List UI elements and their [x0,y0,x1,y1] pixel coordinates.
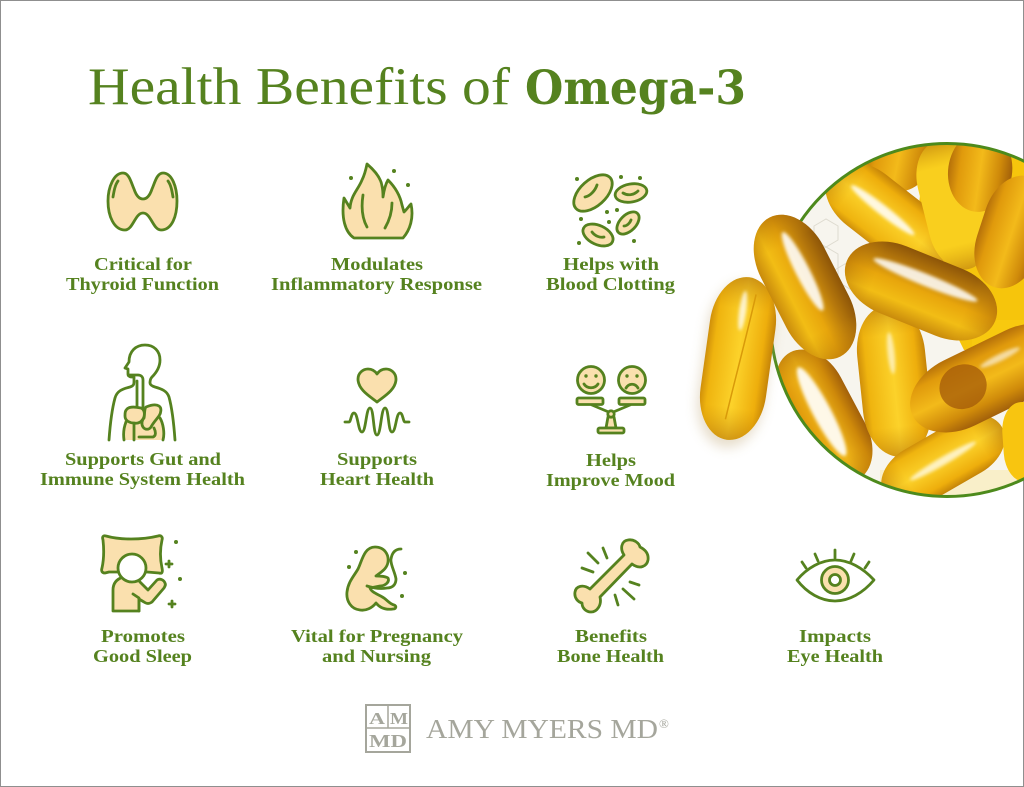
photo: omega-3 capsules in a circle [692,142,1024,498]
logo: Amy Myers MD [366,705,669,752]
icon: heart with pulse wave [345,369,409,435]
logo wordmark: ® [659,716,669,731]
icon: fetus [347,547,407,610]
label: sleep: Promotes [101,626,185,646]
label: heart health: Supports [337,449,417,469]
label: sleep [93,626,192,666]
item: eye health [787,550,883,666]
icon: body with digestive system [109,345,175,440]
label: heart health: Heart Health [320,469,434,489]
icon: thyroid [108,173,177,230]
icon: flame [343,164,412,238]
circle image [774,145,1024,495]
icon: bone [575,540,648,612]
capsule: tilted over circle edge [738,202,872,372]
label: gut and immune: Supports Gut and [65,449,221,469]
icon: blood cells [567,168,648,250]
icon: eye [797,550,874,601]
label: bone health: Benefits [575,626,647,646]
title [88,58,746,116]
logo mark: A [369,709,386,728]
label: blood clotting: Blood Clotting [546,274,675,294]
capsule: left free-standing [694,273,782,444]
title: Omega-3 [525,61,746,116]
item: mood [546,366,675,490]
label: eye health [787,626,883,666]
item: inflammatory response [271,164,482,294]
capsule shadows [691,278,780,452]
label: mood: Improve Mood [546,470,675,490]
logo mark: M [390,709,408,728]
logo wordmark: AMY MYERS MD [426,714,658,744]
label: heart health [320,449,434,489]
item: thyroid function [66,173,219,294]
item: sleep [93,536,192,666]
label: pregnancy [291,626,463,666]
label: eye health: Impacts [799,626,871,646]
icon: person sleeping on a pillow [102,536,182,611]
logo mark [366,705,410,752]
circle outline [770,144,1024,496]
label: bone health: Bone Health [557,646,664,666]
label: mood: Helps [586,450,636,470]
label: thyroid [66,254,219,294]
label: blood clotting: Helps with [563,254,659,274]
label: gut and immune: Immune System Health [40,469,245,489]
label: pregnancy: and Nursing [322,646,431,666]
item: bone health [557,540,664,666]
label: pregnancy: Vital for Pregnancy [291,626,463,646]
item: gut and immune system [40,345,245,489]
item: blood clotting [546,168,675,294]
icon: faces on a balance scale [577,366,646,433]
logo mark: MD [369,731,407,751]
label: gut and immune [40,449,245,489]
label: inflammatory: Modulates [331,254,423,274]
label: inflammatory: Inflammatory Response [271,274,482,294]
label: sleep: Good Sleep [93,646,192,666]
label: inflammatory [271,254,482,294]
label: mood [546,450,675,490]
label: eye health: Eye Health [787,646,883,666]
title: Health Benefits of [88,58,510,116]
label: bone health [557,626,664,666]
item: pregnancy and nursing [291,547,463,666]
label: thyroid: Thyroid Function [66,274,219,294]
item: heart health [320,369,434,489]
label: blood clotting [546,254,675,294]
label: thyroid: Critical for [94,254,192,274]
